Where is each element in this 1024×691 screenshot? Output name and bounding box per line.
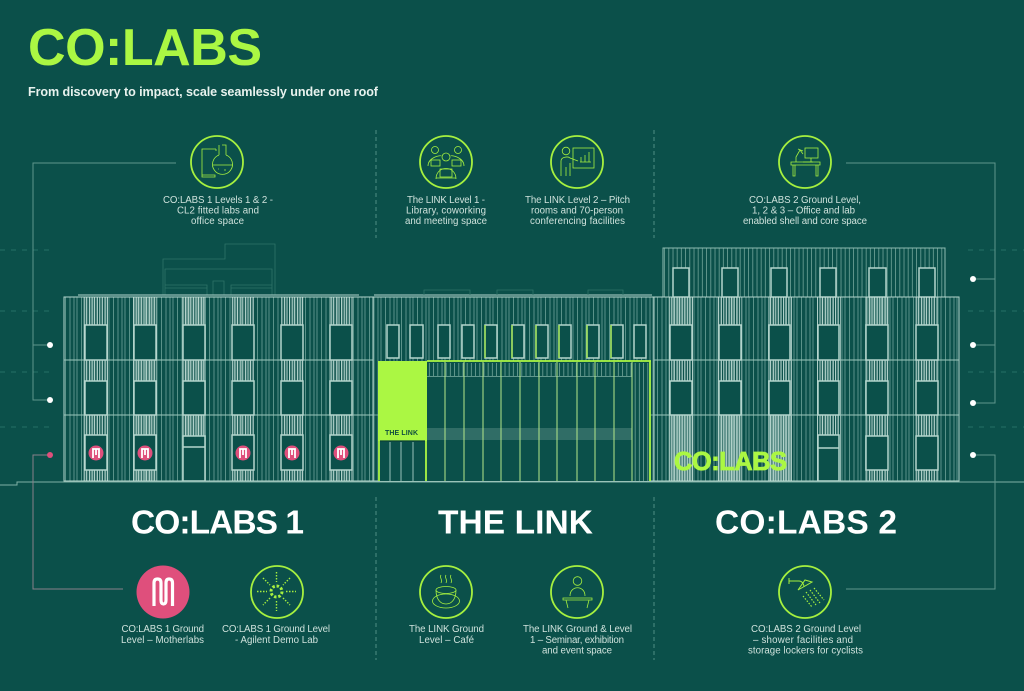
subtitle: From discovery to impact, scale seamlessly under one roof: [28, 85, 379, 99]
item: CO:LABS 1 Levels 1 and 2: office space: [191, 216, 244, 227]
item: Agilent Demo Lab: - Agilent Demo Lab: [235, 635, 318, 646]
windows: [85, 325, 352, 481]
connector: Motherlabs: [33, 452, 123, 589]
heading: CO:LABS 2: CO:LABS 2: [715, 504, 897, 542]
building: CO:LABS 1: [64, 295, 373, 481]
connector: CO:LABS 2 ground: [846, 452, 995, 589]
building: The LINK: [373, 290, 654, 481]
item: CO:LABS 2 upper levels: enabled shell and core space: [743, 216, 867, 227]
item: The LINK Level 1: The LINK Level 1 -: [407, 195, 485, 206]
icon: lab flask: [191, 136, 243, 188]
item: Café: The LINK Ground: [409, 624, 484, 635]
connector: CO:LABS 1 upper levels: [33, 163, 176, 403]
icon: Agilent spark: [251, 566, 303, 618]
rooftop plant of CO:LABS 1: [163, 244, 275, 295]
entrance frame: [379, 361, 651, 481]
CO:LABS signage: CO:LABS: [674, 448, 787, 476]
item: The LINK Level 2: rooms and 70-person: [531, 206, 623, 216]
item: Motherlabs: CO:LABS 1 Ground: [122, 624, 204, 635]
item: The LINK Level 2: The LINK Level 2 – Pitch: [525, 195, 630, 206]
item: The LINK Level 1: [405, 136, 487, 227]
item: CO:LABS 1 Levels 1 and 2: CL2 fitted labs and: [177, 206, 259, 216]
building: CO:LABS 2: [654, 248, 959, 481]
item: Showers and lockers: storage lockers for cyclists: [748, 646, 863, 656]
item: Showers and lockers: CO:LABS 2 Ground Level: [751, 624, 861, 635]
upper storey: [663, 248, 945, 297]
heading: CO:LABS 1: CO:LABS 1: [131, 504, 304, 542]
Motherlabs markers: [88, 446, 348, 460]
item: Café: [409, 566, 484, 646]
ground line: [0, 482, 1024, 485]
item: Café: Level – Café: [419, 635, 474, 646]
title: CO:LABS: [28, 19, 262, 77]
upper windows: [387, 325, 646, 358]
item: Seminar and event space: The LINK Ground & Level: [523, 624, 632, 635]
glass band: [427, 428, 632, 440]
dense facade bands: [83, 297, 353, 481]
item: Agilent Demo Lab: [222, 566, 330, 646]
item: Showers and lockers: – shower facilities and: [753, 635, 853, 646]
item: Motherlabs: Level – Motherlabs: [121, 635, 204, 646]
item: The LINK Level 1: Library, coworking: [406, 206, 486, 216]
item: Motherlabs: [121, 566, 204, 646]
item: The LINK Level 2: [525, 136, 630, 227]
item: Seminar and event space: [523, 566, 632, 656]
icon: people with laptops: [420, 136, 472, 188]
item: The LINK Level 1: and meeting space: [405, 216, 487, 227]
icon: desk with monitor: [779, 136, 831, 188]
item: CO:LABS 2 upper levels: 1, 2 & 3 – Office and lab: [752, 206, 855, 216]
connector: CO:LABS 2 upper levels: [846, 163, 995, 406]
icon: Motherlabs logo: [136, 566, 190, 618]
item: CO:LABS 2 upper levels: [743, 136, 867, 227]
item: CO:LABS 2 upper levels: CO:LABS 2 Ground Level,: [749, 195, 861, 206]
heading: THE LINK: THE LINK: [438, 504, 593, 542]
item: CO:LABS 1 Levels 1 and 2: CO:LABS 1 Levels 1 & 2 -: [163, 195, 273, 206]
item: The LINK Level 2: conferencing facilities: [530, 216, 625, 227]
icon: speaker at lectern: [551, 566, 603, 618]
green LINK block: [378, 361, 427, 441]
icon: shower head: [779, 566, 831, 618]
icon: presenter with chart: [551, 136, 603, 188]
icon: coffee cup: [420, 566, 472, 618]
item: Seminar and event space: and event space: [542, 646, 612, 656]
glazing mullions: [445, 362, 632, 481]
item: Seminar and event space: 1 – Seminar, exhibition: [530, 635, 624, 646]
item: Agilent Demo Lab: CO:LABS 1 Ground Level: [222, 624, 330, 635]
green LINK block: THE LINK: [385, 430, 418, 437]
item: Showers and lockers: [748, 566, 863, 656]
item: CO:LABS 1 Levels 1 and 2: [163, 136, 273, 227]
